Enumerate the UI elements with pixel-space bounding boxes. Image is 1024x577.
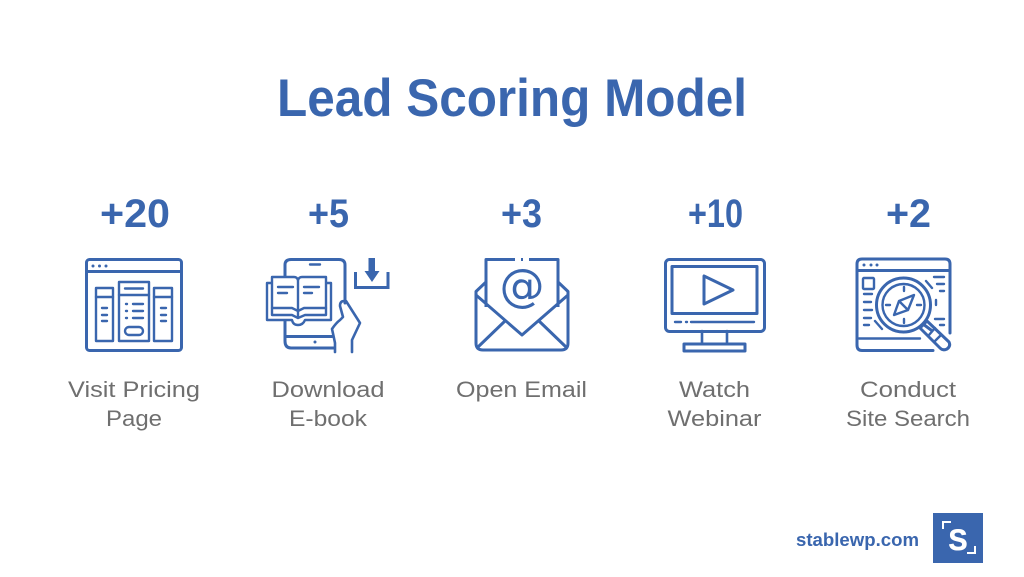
label: watch webinar: Webinar bbox=[668, 406, 762, 431]
icon: pricing page window bbox=[86, 260, 182, 350]
label: open email: Open Email bbox=[456, 377, 587, 402]
label: download e-book: E-book bbox=[289, 406, 368, 431]
icon: tablet with book and download bbox=[267, 258, 388, 352]
score: +20: +20 bbox=[100, 192, 170, 236]
label: conduct site search: Site Search bbox=[846, 406, 970, 431]
icon: open envelope with at sign bbox=[476, 259, 568, 350]
label: watch webinar: Watch bbox=[679, 377, 750, 402]
icon: monitor with play button bbox=[666, 260, 764, 351]
column: visit pricing page bbox=[68, 192, 200, 431]
label: download e-book: Download bbox=[272, 377, 384, 402]
icon: open envelope with at sign: @ bbox=[500, 259, 544, 312]
score: +3: +3 bbox=[501, 192, 542, 236]
score: +2: +2 bbox=[886, 192, 931, 236]
column: download e-book bbox=[267, 192, 388, 431]
title: Lead Scoring Model bbox=[277, 69, 747, 128]
label: conduct site search: Conduct bbox=[860, 377, 956, 402]
brand logo bbox=[933, 513, 983, 563]
column: conduct site search bbox=[846, 192, 970, 431]
brand url: stablewp.com bbox=[796, 530, 919, 550]
column: open email bbox=[456, 192, 587, 402]
score: +5: +5 bbox=[308, 192, 349, 236]
label: visit pricing page: Visit Pricing bbox=[68, 377, 200, 402]
score: +10: +10 bbox=[688, 192, 743, 236]
icon: browser window with magnifier and compass bbox=[857, 259, 950, 350]
label: visit pricing page: Page bbox=[106, 406, 162, 431]
brand logo: S bbox=[948, 524, 968, 557]
column: watch webinar bbox=[666, 192, 764, 431]
